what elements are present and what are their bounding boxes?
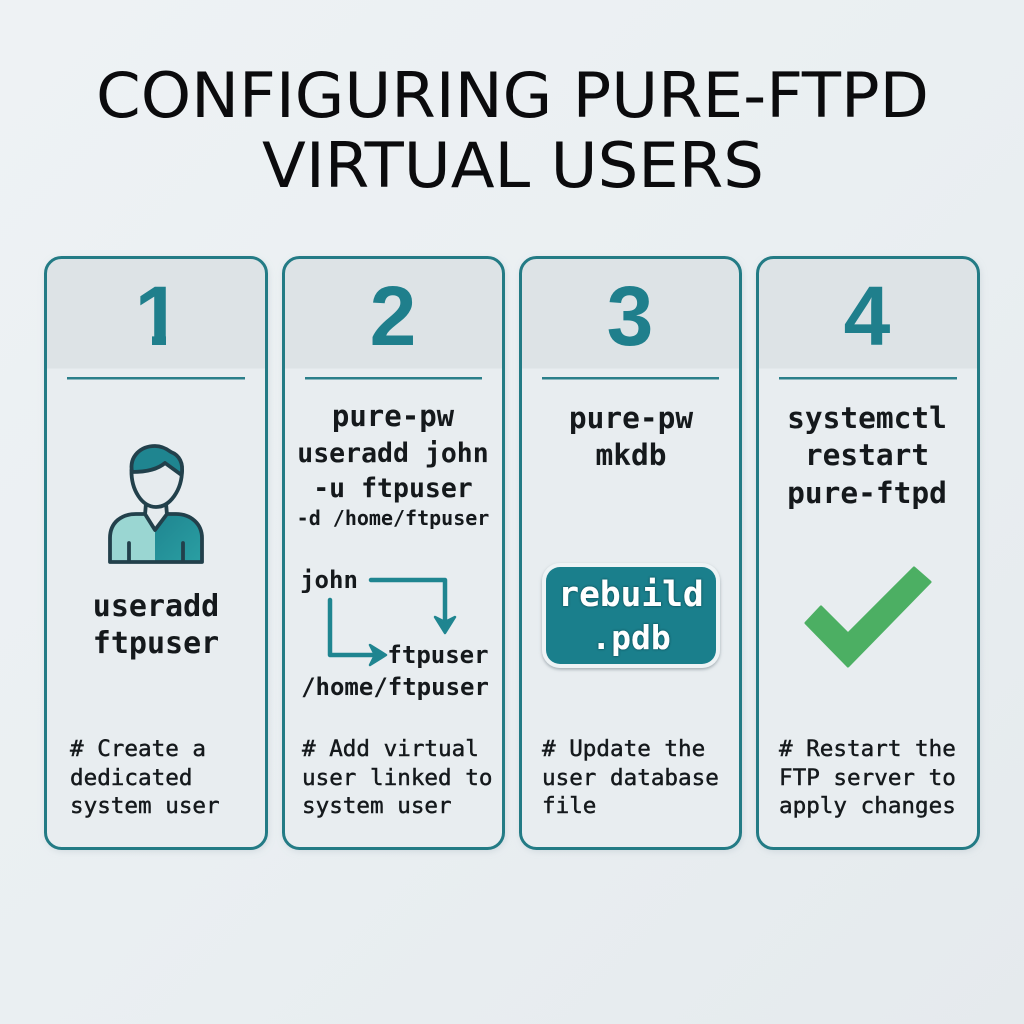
step number 4: 4 [844,269,891,363]
panel: step 4 [758,258,978,848]
step number 3: 3 [607,269,653,363]
badge: rebuild .pdb: rebuild [558,575,704,615]
badge: rebuild .pdb: .pdb [591,618,671,657]
note: step 3: # Update the [542,736,705,762]
note: step 1: dedicated [70,765,192,791]
panel: step 1 [46,258,266,848]
note: step 2: system user [302,793,452,819]
command: pure-pw mkdb [569,401,693,472]
title: CONFIGURING PURE-FTPD [96,59,929,132]
command: systemctl restart pure-ftpd: restart [805,438,929,472]
command: systemctl restart pure-ftpd: systemctl [787,401,947,435]
step number 2: 2 [370,269,416,363]
command: useradd ftpuser: ftpuser [93,626,219,661]
diagram: john to ftpuser mapping: ftpuser [387,641,489,669]
note: step 1 [70,736,220,819]
note: step 4: FTP server to [779,765,956,791]
diagram: john to ftpuser mapping [300,566,489,701]
command: pure-pw useradd: pure-pw [332,399,455,433]
command: pure-pw useradd: -u ftpuser [313,473,473,504]
diagram: john to ftpuser mapping: /home/ftpuser [301,673,489,701]
command: useradd ftpuser [93,589,219,661]
command: pure-pw useradd: useradd john [297,438,489,469]
badge: rebuild .pdb [542,563,720,668]
note: step 3 [542,736,719,819]
note: step 2 [302,736,492,819]
note: step 1: system user [70,793,220,819]
command: useradd ftpuser: useradd [93,589,219,624]
command: pure-pw useradd: -d /home/ftpuser [297,506,489,530]
command: pure-pw mkdb: mkdb [595,438,667,472]
panel: step 2 [284,258,504,848]
note: step 4: apply changes [779,793,956,819]
note: step 3: file [542,793,596,819]
command: pure-pw useradd [297,399,489,530]
title: VIRTUAL USERS [262,129,764,202]
note: step 3: user database [542,765,719,791]
note: step 1: # Create a [70,736,206,762]
icon: green check mark [806,568,930,666]
diagram: john to ftpuser mapping: john [300,566,358,594]
note: step 4: # Restart the [779,736,956,762]
icon: user [110,446,202,562]
note: step 4 [779,736,956,819]
title [96,59,929,202]
note: step 2: # Add virtual [302,736,479,762]
command: pure-pw mkdb: pure-pw [569,401,693,435]
command: systemctl restart pure-ftpd [787,401,947,510]
note: step 2: user linked to [302,765,492,791]
step number 1: 1 [135,269,181,363]
command: systemctl restart pure-ftpd: pure-ftpd [787,476,947,510]
panel: step 3 [520,258,740,848]
